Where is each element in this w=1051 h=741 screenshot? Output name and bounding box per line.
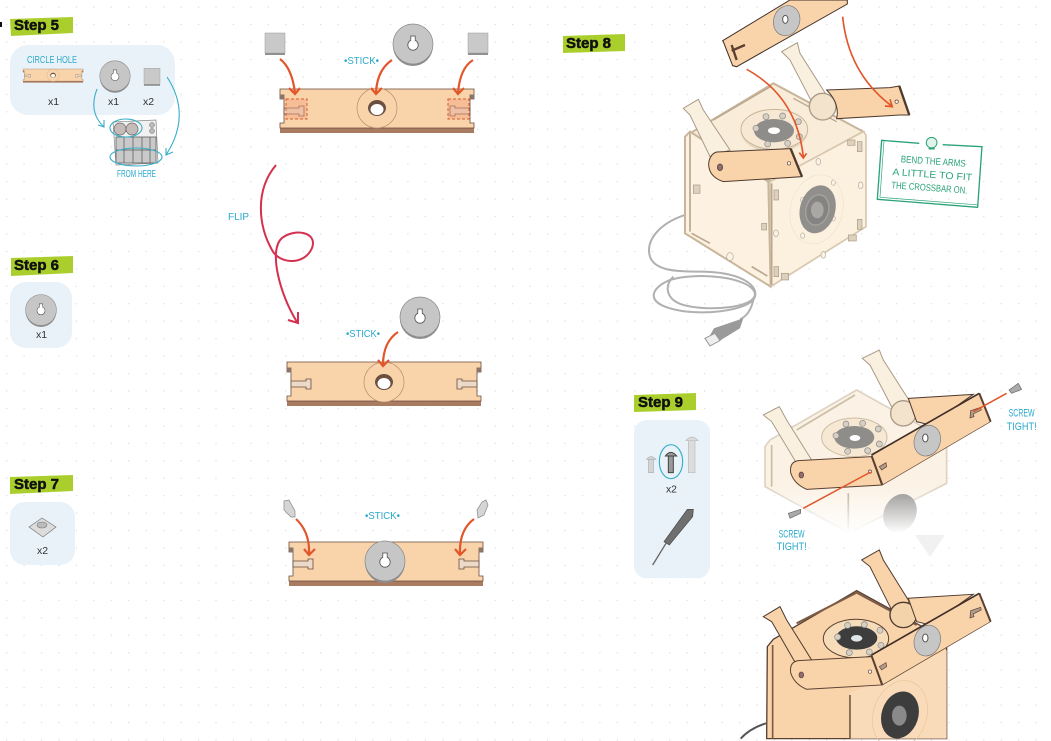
step 7 heading: [10, 475, 73, 494]
cube faces: [767, 591, 947, 739]
speaker: [864, 673, 936, 741]
gray squares: [265, 33, 285, 55]
red lines and screws: [803, 393, 1007, 508]
quantity: x2: [666, 485, 677, 496]
top disc: [741, 111, 808, 152]
arrow: disc to sheet: [94, 89, 104, 127]
cube tabs: [693, 140, 862, 280]
callout: bend the arms: [877, 137, 982, 207]
panel: step 6 parts: [10, 282, 72, 348]
flip label: FLIP: [228, 211, 249, 223]
speaker: [782, 169, 851, 250]
lightbulb icon: [926, 137, 937, 149]
step 9 first assembly: [757, 350, 1037, 553]
step 7 assembly: [284, 500, 488, 586]
step 7 assembly: •STICK•: [365, 510, 400, 522]
mini board: [23, 69, 83, 83]
usb cable: [649, 215, 755, 319]
square part: [144, 68, 160, 86]
front arm: [709, 149, 802, 182]
screw tight left: [777, 528, 807, 553]
faded cube: [765, 390, 947, 532]
step 9 heading: Step 9: [638, 394, 683, 411]
step 5 assembly: [265, 24, 488, 133]
step 5 heading: [10, 17, 73, 36]
circle hole label: CIRCLE HOLE: [27, 54, 77, 66]
screw tight right: [1007, 408, 1037, 433]
screws: [647, 437, 698, 479]
stick label: •STICK•: [344, 55, 379, 67]
step 6 heading: [11, 256, 73, 276]
back arms: [683, 99, 730, 157]
panel: step 9 tools: [634, 420, 710, 578]
quantity x1 disc: x1: [108, 96, 119, 108]
panel: step 6 parts: x1: [36, 329, 47, 341]
right arm: [827, 86, 909, 119]
board: [280, 89, 474, 133]
screwdriver: [653, 509, 693, 565]
step 8 assembly: [649, 0, 909, 346]
panel: step 5 parts: [10, 45, 175, 115]
quantity x1 board: x1: [48, 96, 59, 108]
cube screw holes: [727, 158, 863, 261]
arrows: [280, 59, 473, 94]
down arrow: [915, 535, 945, 557]
page edge mark: [0, 22, 2, 27]
callout text: A LITTLE TO FIT: [892, 167, 973, 184]
step 7 heading: Step 7: [14, 476, 59, 493]
disc: [393, 24, 433, 66]
panel: step 7 parts: [10, 502, 75, 565]
callout text: BEND THE ARMS: [900, 154, 966, 170]
step 9 heading: [634, 393, 696, 412]
quantity x2 square: x2: [143, 96, 154, 108]
usb plug: [705, 318, 743, 346]
cube faces: [690, 83, 863, 182]
arms and crossbar: [790, 393, 991, 489]
panel: step 7 parts: x2: [37, 545, 48, 557]
flip arrow: [261, 165, 313, 323]
top disc: [823, 619, 889, 658]
parts sheet: [110, 119, 162, 166]
screw tight left: TIGHT!: [777, 541, 807, 553]
step 6 assembly: [287, 297, 481, 406]
disc part: [100, 61, 130, 93]
orange arrows: [747, 17, 892, 158]
cable: [741, 723, 766, 739]
back arms: [763, 607, 812, 665]
callout text: [891, 154, 974, 197]
screw tight left: SCREW: [779, 528, 805, 540]
adhesive squares outline: [286, 99, 469, 119]
from here label: FROM HERE: [117, 168, 156, 180]
step 9 final assembly: [741, 550, 991, 741]
arms and crossbar: [790, 593, 991, 689]
step 8 heading: Step 8: [566, 35, 611, 52]
arrow: square to sheet: [166, 77, 179, 155]
screw tight right: TIGHT!: [1007, 421, 1037, 433]
step 6 heading: Step 6: [14, 257, 59, 274]
step 5 heading: Step 5: [14, 17, 59, 34]
callout text: THE CROSSBAR ON.: [891, 180, 968, 197]
step 6 assembly: •STICK•: [346, 328, 380, 340]
crossbar: [723, 0, 847, 67]
screw tight right: SCREW: [1009, 408, 1035, 420]
step 8 heading: [563, 34, 625, 53]
